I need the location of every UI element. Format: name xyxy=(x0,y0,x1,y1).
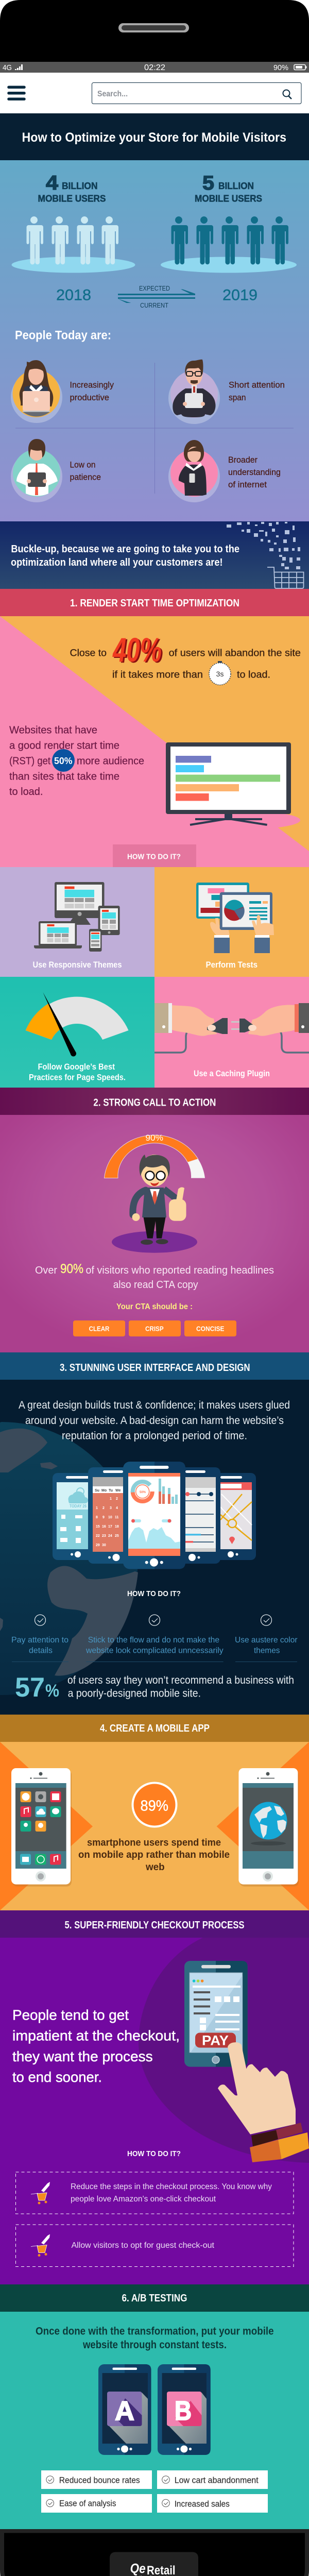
stat: 57 percent: % xyxy=(45,1681,59,1701)
stat: 4 billion xyxy=(38,172,106,204)
panel: checkout process xyxy=(0,1938,309,2284)
phone: calendar: 10 xyxy=(108,1516,112,1519)
text: once done: website through constant tests. xyxy=(82,2339,227,2351)
phone: calendar: 8 xyxy=(96,1516,98,1519)
section heading 5: 5. SUPER-FRIENDLY CHECKOUT PROCESS xyxy=(65,1920,244,1931)
button: clear: CLEAR xyxy=(89,1325,110,1332)
icon: stopwatch 3s xyxy=(209,661,231,685)
phone: calendar: 15 xyxy=(96,1525,100,1529)
phone: calendar: 1 xyxy=(96,1506,98,1510)
status bar: 4G xyxy=(3,63,12,72)
phone: variant B: B xyxy=(175,2396,192,2426)
icon: monitor with bar chart xyxy=(166,742,291,825)
icon: rocket cart xyxy=(31,2234,50,2257)
stat: 4 billion: 4 xyxy=(46,172,58,194)
phone: calendar: 4 xyxy=(116,1506,118,1510)
stat text: 40 percent: if it takes more than xyxy=(112,670,203,681)
benefit: low cart abandonment xyxy=(157,2470,268,2489)
icon: tablets with analytics xyxy=(196,883,274,953)
text: websites good render start time: than sites that take time xyxy=(9,771,119,782)
icon: hamburger menu xyxy=(7,86,26,100)
tip box: reduce the steps: people love Amazon’s one-click checkout xyxy=(71,2195,216,2204)
stat: 5 billion: MOBILE USERS xyxy=(195,194,262,204)
card: use responsive themes: Use Responsive Themes xyxy=(33,960,122,970)
panel: mobile users xyxy=(0,160,309,521)
tip box: reduce the steps xyxy=(15,2172,294,2214)
icon: shopping cart xyxy=(267,567,304,588)
phone: weather: TODAY 26 xyxy=(70,1504,87,1509)
text: over 90 percent xyxy=(35,1262,274,1291)
phone: variant A: A xyxy=(115,2396,134,2426)
card: google page speed: Practices for Page Speeds. xyxy=(29,1073,126,1082)
year 2019: 2019 xyxy=(222,286,258,304)
tip box: guest checkout: Allow visitors to opt for guest check-out xyxy=(71,2241,215,2250)
badge: 89%: 89% xyxy=(140,1798,168,1814)
phone: calendar: 17 xyxy=(108,1525,112,1529)
big number 40%: 40% xyxy=(114,632,163,670)
arrow: expected and current xyxy=(118,284,195,309)
section heading 1: 1. RENDER START TIME OPTIMIZATION xyxy=(70,598,239,609)
text: great design paragraph: A great design builds trust & confidence; it makes users glued xyxy=(19,1399,290,1411)
text: people tend to get impatient: People tend to get xyxy=(12,2007,129,2023)
button: how to do it: HOW TO DO IT? xyxy=(127,852,181,861)
benefit: low cart abandonment: Low cart abandonment xyxy=(175,2476,259,2485)
icons: 5 people 2019 xyxy=(171,216,288,265)
phone: calendar: Su xyxy=(95,1489,99,1493)
text: websites good render start time: Websites that have xyxy=(9,725,97,736)
text: low on patience: Low on xyxy=(70,460,96,470)
chart: 90 percent gauge: 90% xyxy=(145,1133,163,1143)
tip: austere color themes: Use austere color xyxy=(235,1636,298,1645)
section heading 3: 3. STUNNING USER INTERFACE AND DESIGN xyxy=(60,1362,250,1374)
section heading 1 xyxy=(0,589,309,616)
section heading 2 xyxy=(0,1088,309,1115)
platform right xyxy=(161,257,297,273)
phone: calendar: 18 xyxy=(115,1525,119,1529)
phone: map xyxy=(210,1473,256,1560)
tip: pay attention to details: details xyxy=(29,1647,53,1655)
card: caching plugin: Use a Caching Plugin xyxy=(194,1069,270,1078)
button: clear xyxy=(73,1320,125,1336)
benefit: reduced bounce rates: Reduced bounce rates xyxy=(59,2476,140,2485)
purple platform xyxy=(112,1231,197,1253)
text: websites good render start time: (RST) get xyxy=(9,755,50,767)
phone: calendar: 29 xyxy=(96,1544,100,1547)
benefit: increased sales: Increased sales xyxy=(175,2500,230,2509)
section heading 2: 2. STRONG CALL TO ACTION xyxy=(93,1097,216,1108)
text: people tend to get impatient: they want the process xyxy=(12,2048,153,2064)
avatar: woman with phone xyxy=(168,440,220,502)
benefit: increased sales xyxy=(157,2494,268,2513)
text: smartphone users xyxy=(78,1838,230,1873)
text: your cta should be: Your CTA should be : xyxy=(116,1302,193,1311)
search box: Search... xyxy=(97,90,128,98)
card: caching plugin xyxy=(154,977,309,1088)
stat text: 40 percent: of users will abandon the site xyxy=(169,648,301,659)
phone: calendar: 1 xyxy=(110,1497,112,1501)
benefit: ease of analysis: Ease of analysis xyxy=(59,2499,116,2509)
text: people tend to get impatient xyxy=(12,2007,180,2085)
logo: qeretail small: Qe xyxy=(130,2561,146,2576)
stat: 57 percent xyxy=(15,1672,294,1703)
stat: 4 billion: BILLION xyxy=(62,181,98,191)
card: perform tests: Perform Tests xyxy=(206,960,258,970)
text: short attention span: span xyxy=(229,393,246,402)
text: broader understanding of internet: of internet xyxy=(228,480,267,489)
avatar: woman with laptop xyxy=(11,360,62,423)
text: increasingly productive: productive xyxy=(70,393,109,402)
avatar: man in white shirt xyxy=(11,439,62,502)
heading: people today: People Today are: xyxy=(15,329,111,342)
phone: variant B xyxy=(158,2364,211,2455)
navigation bar with search xyxy=(0,73,309,113)
tip: pay attention to details: Pay attention to xyxy=(11,1636,68,1645)
heading: how to do it: HOW TO DO IT? xyxy=(127,1589,181,1598)
phone: calendar: 25 xyxy=(115,1534,119,1538)
text: over 90 percent: Over xyxy=(35,1265,57,1276)
icons: 4 people 2018 xyxy=(27,216,118,265)
text: low on patience: patience xyxy=(70,472,101,482)
text: smartphone users: smartphone users spend time xyxy=(87,1838,221,1849)
text: over 90 percent: of visitors who reported reading headlines xyxy=(85,1265,274,1276)
phone: calendar: 16 xyxy=(102,1525,106,1529)
stat text: 40 percent: Close to xyxy=(70,648,107,659)
phone: dashboard center: 50% xyxy=(140,1491,146,1494)
button: concise: CONCISE xyxy=(196,1325,225,1332)
text: over 90 percent: 90% xyxy=(60,1262,83,1276)
panel: create a mobile app xyxy=(0,1742,309,1910)
character: businessman thumbs up xyxy=(132,1155,186,1245)
panel: strong call to action xyxy=(0,1115,309,1352)
card: google page speed xyxy=(0,977,154,1088)
platform left xyxy=(11,257,135,273)
tip: stick to the flow: website look complicated unncessarily xyxy=(85,1647,224,1655)
phone: calendar: Tu xyxy=(109,1489,113,1493)
card: google page speed: Follow Google’s Best xyxy=(38,1062,115,1072)
text: great design paragraph xyxy=(19,1399,290,1442)
arrow: expected and current: CURRENT xyxy=(140,301,168,309)
big number 40%: 40% xyxy=(112,631,162,669)
stat: 57 percent: 57 xyxy=(15,1672,45,1703)
stat: 4 billion: MOBILE USERS xyxy=(38,194,106,204)
tip: stick to the flow xyxy=(85,1615,224,1655)
stat: 57 percent: a poorly-designed mobile site. xyxy=(68,1688,201,1700)
tip: pay attention to details xyxy=(11,1615,68,1655)
button: crisp: CRISP xyxy=(145,1325,164,1332)
phone: calendar: 3 xyxy=(110,1506,112,1510)
text: websites good render start time xyxy=(9,725,144,798)
text: increasingly productive xyxy=(70,380,114,402)
globe background xyxy=(0,1422,138,1695)
stat: 5 billion xyxy=(195,172,262,204)
title xyxy=(0,113,309,160)
text: websites good render start time: a good render start time xyxy=(9,740,119,752)
stat: 57 percent: of users say they won’t recommend a business with xyxy=(67,1674,294,1686)
section heading 4: 4. CREATE A MOBILE APP xyxy=(100,1723,210,1734)
button: concise xyxy=(184,1320,236,1336)
status bar xyxy=(0,62,309,73)
benefit: ease of analysis xyxy=(41,2494,152,2513)
phone: calendar: 24 xyxy=(108,1534,112,1538)
tip: austere color themes xyxy=(235,1615,298,1655)
panel: buckle-up banner: optimization land where all your customers are! xyxy=(11,557,222,568)
tip box: guest checkout xyxy=(15,2225,294,2267)
badge: 50% xyxy=(52,749,75,772)
text: once done xyxy=(36,2326,274,2351)
logo: qeretail small xyxy=(130,2561,176,2576)
heading: how to do it: HOW TO DO IT? xyxy=(127,2149,181,2158)
section heading 6: 6. A/B TESTING xyxy=(122,2293,187,2304)
status bar: 90% xyxy=(273,63,288,72)
phone: calendar xyxy=(88,1467,129,1564)
phone: calendar: 30 xyxy=(102,1544,106,1547)
text: smartphone users: web xyxy=(145,1862,165,1873)
text: great design paragraph: around your website. A bad-design can harm the website’s xyxy=(25,1415,284,1427)
chart: 90 percent gauge xyxy=(104,1133,205,1178)
stat text: 40 percent: to load. xyxy=(237,670,270,681)
stat: 5 billion: BILLION xyxy=(218,181,254,191)
text: websites good render start time: more audience xyxy=(77,755,144,767)
panel: render start time xyxy=(0,616,309,867)
text: broader understanding of internet: Broader xyxy=(228,455,258,465)
tip box: reduce the steps: Reduce the steps in the checkout process. You know why xyxy=(71,2182,272,2191)
panel: stunning design xyxy=(0,1380,309,1715)
year 2018: 2018 xyxy=(56,286,91,304)
text: broader understanding of internet xyxy=(228,455,281,489)
stat: 5 billion: 5 xyxy=(202,172,214,194)
section heading 4 xyxy=(0,1715,309,1742)
text: short attention span: Short attention xyxy=(229,380,285,390)
badge: 50%: 50% xyxy=(54,756,72,766)
phone: app icons xyxy=(11,1768,72,1887)
badge: 89% xyxy=(133,1783,176,1827)
section heading 6 xyxy=(0,2284,309,2312)
text: increasingly productive: Increasingly xyxy=(70,380,114,390)
tip: austere color themes: themes xyxy=(254,1647,280,1655)
phone: calendar: 9 xyxy=(102,1516,105,1519)
icons: scattered ecommerce symbols xyxy=(227,522,300,569)
text: people tend to get impatient: impatient at the checkout, xyxy=(12,2028,180,2044)
panel: a/b testing xyxy=(0,2312,309,2529)
text: great design paragraph: reputation for a prolonged period of time. xyxy=(62,1430,247,1442)
icon: responsive devices xyxy=(34,882,120,952)
stat text: 40 percent xyxy=(70,648,301,681)
benefit: reduced bounce rates xyxy=(41,2470,152,2489)
section heading 5 xyxy=(0,1910,309,1938)
text: short attention span xyxy=(229,380,285,402)
button: crisp xyxy=(129,1320,181,1336)
phone: weather xyxy=(53,1473,99,1560)
tip: stick to the flow: Stick to the flow and do not make the xyxy=(88,1636,219,1645)
avatar: man with glasses and tablet xyxy=(168,360,220,424)
icon: pointing hand xyxy=(218,2042,309,2162)
panel: buckle-up banner xyxy=(0,521,309,589)
phone: calendar: 23 xyxy=(102,1534,106,1538)
search box xyxy=(92,82,301,104)
phone: globe xyxy=(238,1768,299,1887)
phone: calendar: Mo xyxy=(101,1489,107,1493)
section heading 3 xyxy=(0,1352,309,1380)
card: perform tests xyxy=(154,867,309,977)
text: over 90 percent: also read CTA copy xyxy=(113,1279,198,1291)
phone bottom bezel with logo xyxy=(0,2529,309,2576)
phone: pay screen: PAY xyxy=(202,2033,229,2048)
status bar: 02:22 xyxy=(144,63,165,72)
icon: rocket cart xyxy=(31,2182,50,2204)
text: people tend to get impatient: to end sooner. xyxy=(12,2069,102,2085)
title: How to Optimize your Store for Mobile Visitors xyxy=(22,130,286,145)
icon: plug and socket hands xyxy=(154,1003,309,1053)
phone: dashboard center xyxy=(123,1462,185,1569)
text: low on patience xyxy=(70,460,101,482)
button: how to do it xyxy=(113,844,196,867)
icon: stopwatch 3s: 3s xyxy=(216,670,224,678)
phone: calendar: 22 xyxy=(96,1534,100,1538)
text: smartphone users: on mobile app rather than mobile xyxy=(78,1850,230,1860)
icon: speed gauge xyxy=(26,992,129,1056)
phone: calendar: We xyxy=(115,1489,121,1493)
text: once done: Once done with the transformation, put your mobile xyxy=(36,2326,274,2337)
phone: variant A xyxy=(98,2364,151,2455)
phone: settings xyxy=(180,1467,220,1564)
phone: pay screen xyxy=(184,1961,248,2067)
phone: calendar: 11 xyxy=(115,1516,119,1519)
card: use responsive themes xyxy=(0,867,154,977)
panel: buckle-up banner: Buckle-up, because we are going to take you to the xyxy=(11,544,239,555)
phone: calendar: 2 xyxy=(102,1506,105,1510)
text: broader understanding of internet: understanding xyxy=(228,467,281,477)
arrow: expected and current: EXPECTED xyxy=(139,284,170,292)
text: websites good render start time: to load. xyxy=(9,786,43,798)
phone: calendar: 2 xyxy=(116,1497,118,1501)
